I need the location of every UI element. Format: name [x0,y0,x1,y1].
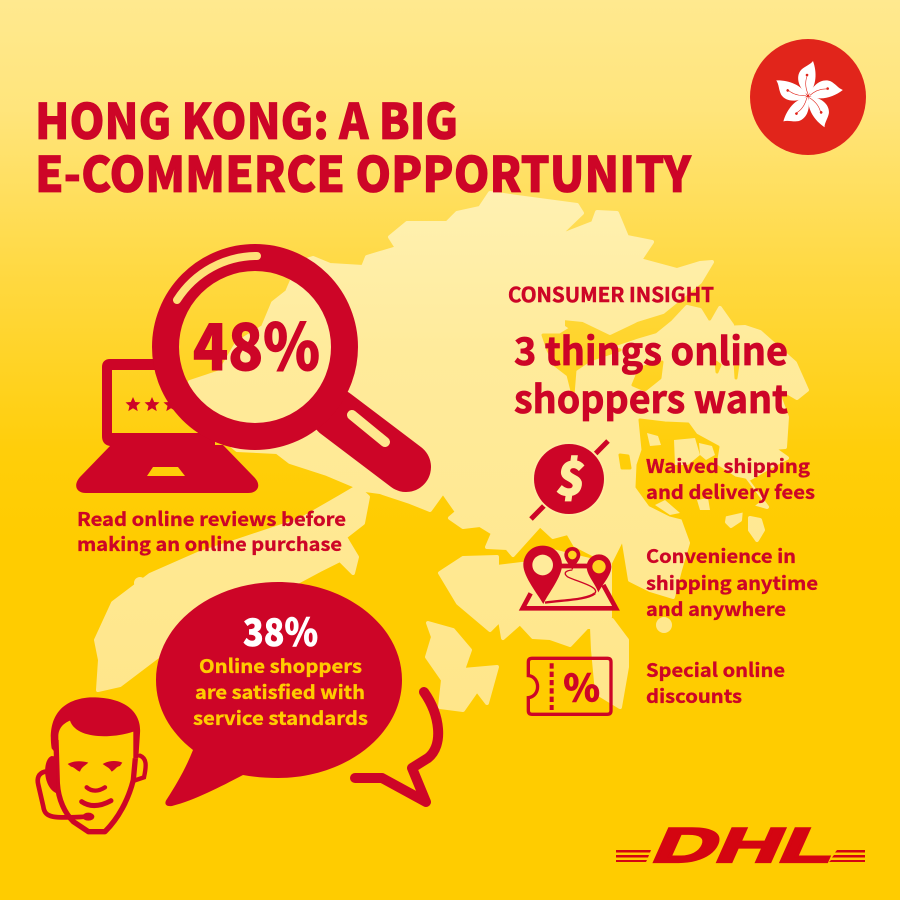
text: waived shipping: Waived shipping [646,452,811,479]
text: waived shipping: and delivery fees [646,478,815,505]
map lakes and islets [647,433,715,515]
heading: 3 things online shoppers want: shoppers want [514,369,788,424]
text: discounts: discounts [646,682,742,709]
caption: satisfied shoppers: service standards [193,704,368,731]
text: waived shipping [646,452,815,505]
heading: consumer insight: CONSUMER INSIGHT [508,279,714,308]
icon: map with route pins [523,546,616,608]
stat: 38%: 38% [243,602,318,657]
caption: reviews: making an online purchase [77,530,342,557]
icon: laptop with star rating [76,359,258,493]
icon: crossed out dollar: $ [553,442,590,509]
text: convenience: shipping anytime [646,569,818,596]
icon: Hong Kong flag [750,39,866,155]
text: convenience: Convenience in [646,542,796,569]
title [35,83,692,207]
title: E-COMMERCE OPPORTUNITY [35,136,692,207]
outline speech bubble tail [355,692,438,802]
caption: reviews [77,505,346,557]
text: discounts [646,656,785,709]
icon: magnifying glass [166,256,406,467]
icon: speech bubble [156,582,402,806]
map of Hong Kong [96,193,807,710]
caption: satisfied shoppers: Online shoppers [199,652,362,679]
logo: DHL [616,817,865,872]
caption: reviews: Read online reviews before [77,505,346,532]
heading: 3 things online shoppers want [514,321,788,424]
title: HONG KONG: A BIG [35,83,458,154]
panel: service standards [38,582,438,832]
heading: 3 things online shoppers want: 3 things online [514,321,788,376]
stat: 48%: 48% [193,297,320,389]
map water inlets [543,327,760,520]
text: discounts: Special online [646,656,785,683]
text: convenience [646,542,818,622]
icon: discount ticket [528,658,611,714]
logo: DHL: DHL [644,817,849,872]
caption: satisfied shoppers [193,652,368,731]
icon: agent with headset [38,697,146,832]
icon: discount ticket: % [563,659,600,713]
text: convenience: and anywhere [646,595,786,622]
panel: consumer insight [508,279,818,714]
caption: satisfied shoppers: are satisfied with [195,678,365,705]
icon: crossed out dollar [531,441,608,519]
panel: online reviews [76,256,406,557]
